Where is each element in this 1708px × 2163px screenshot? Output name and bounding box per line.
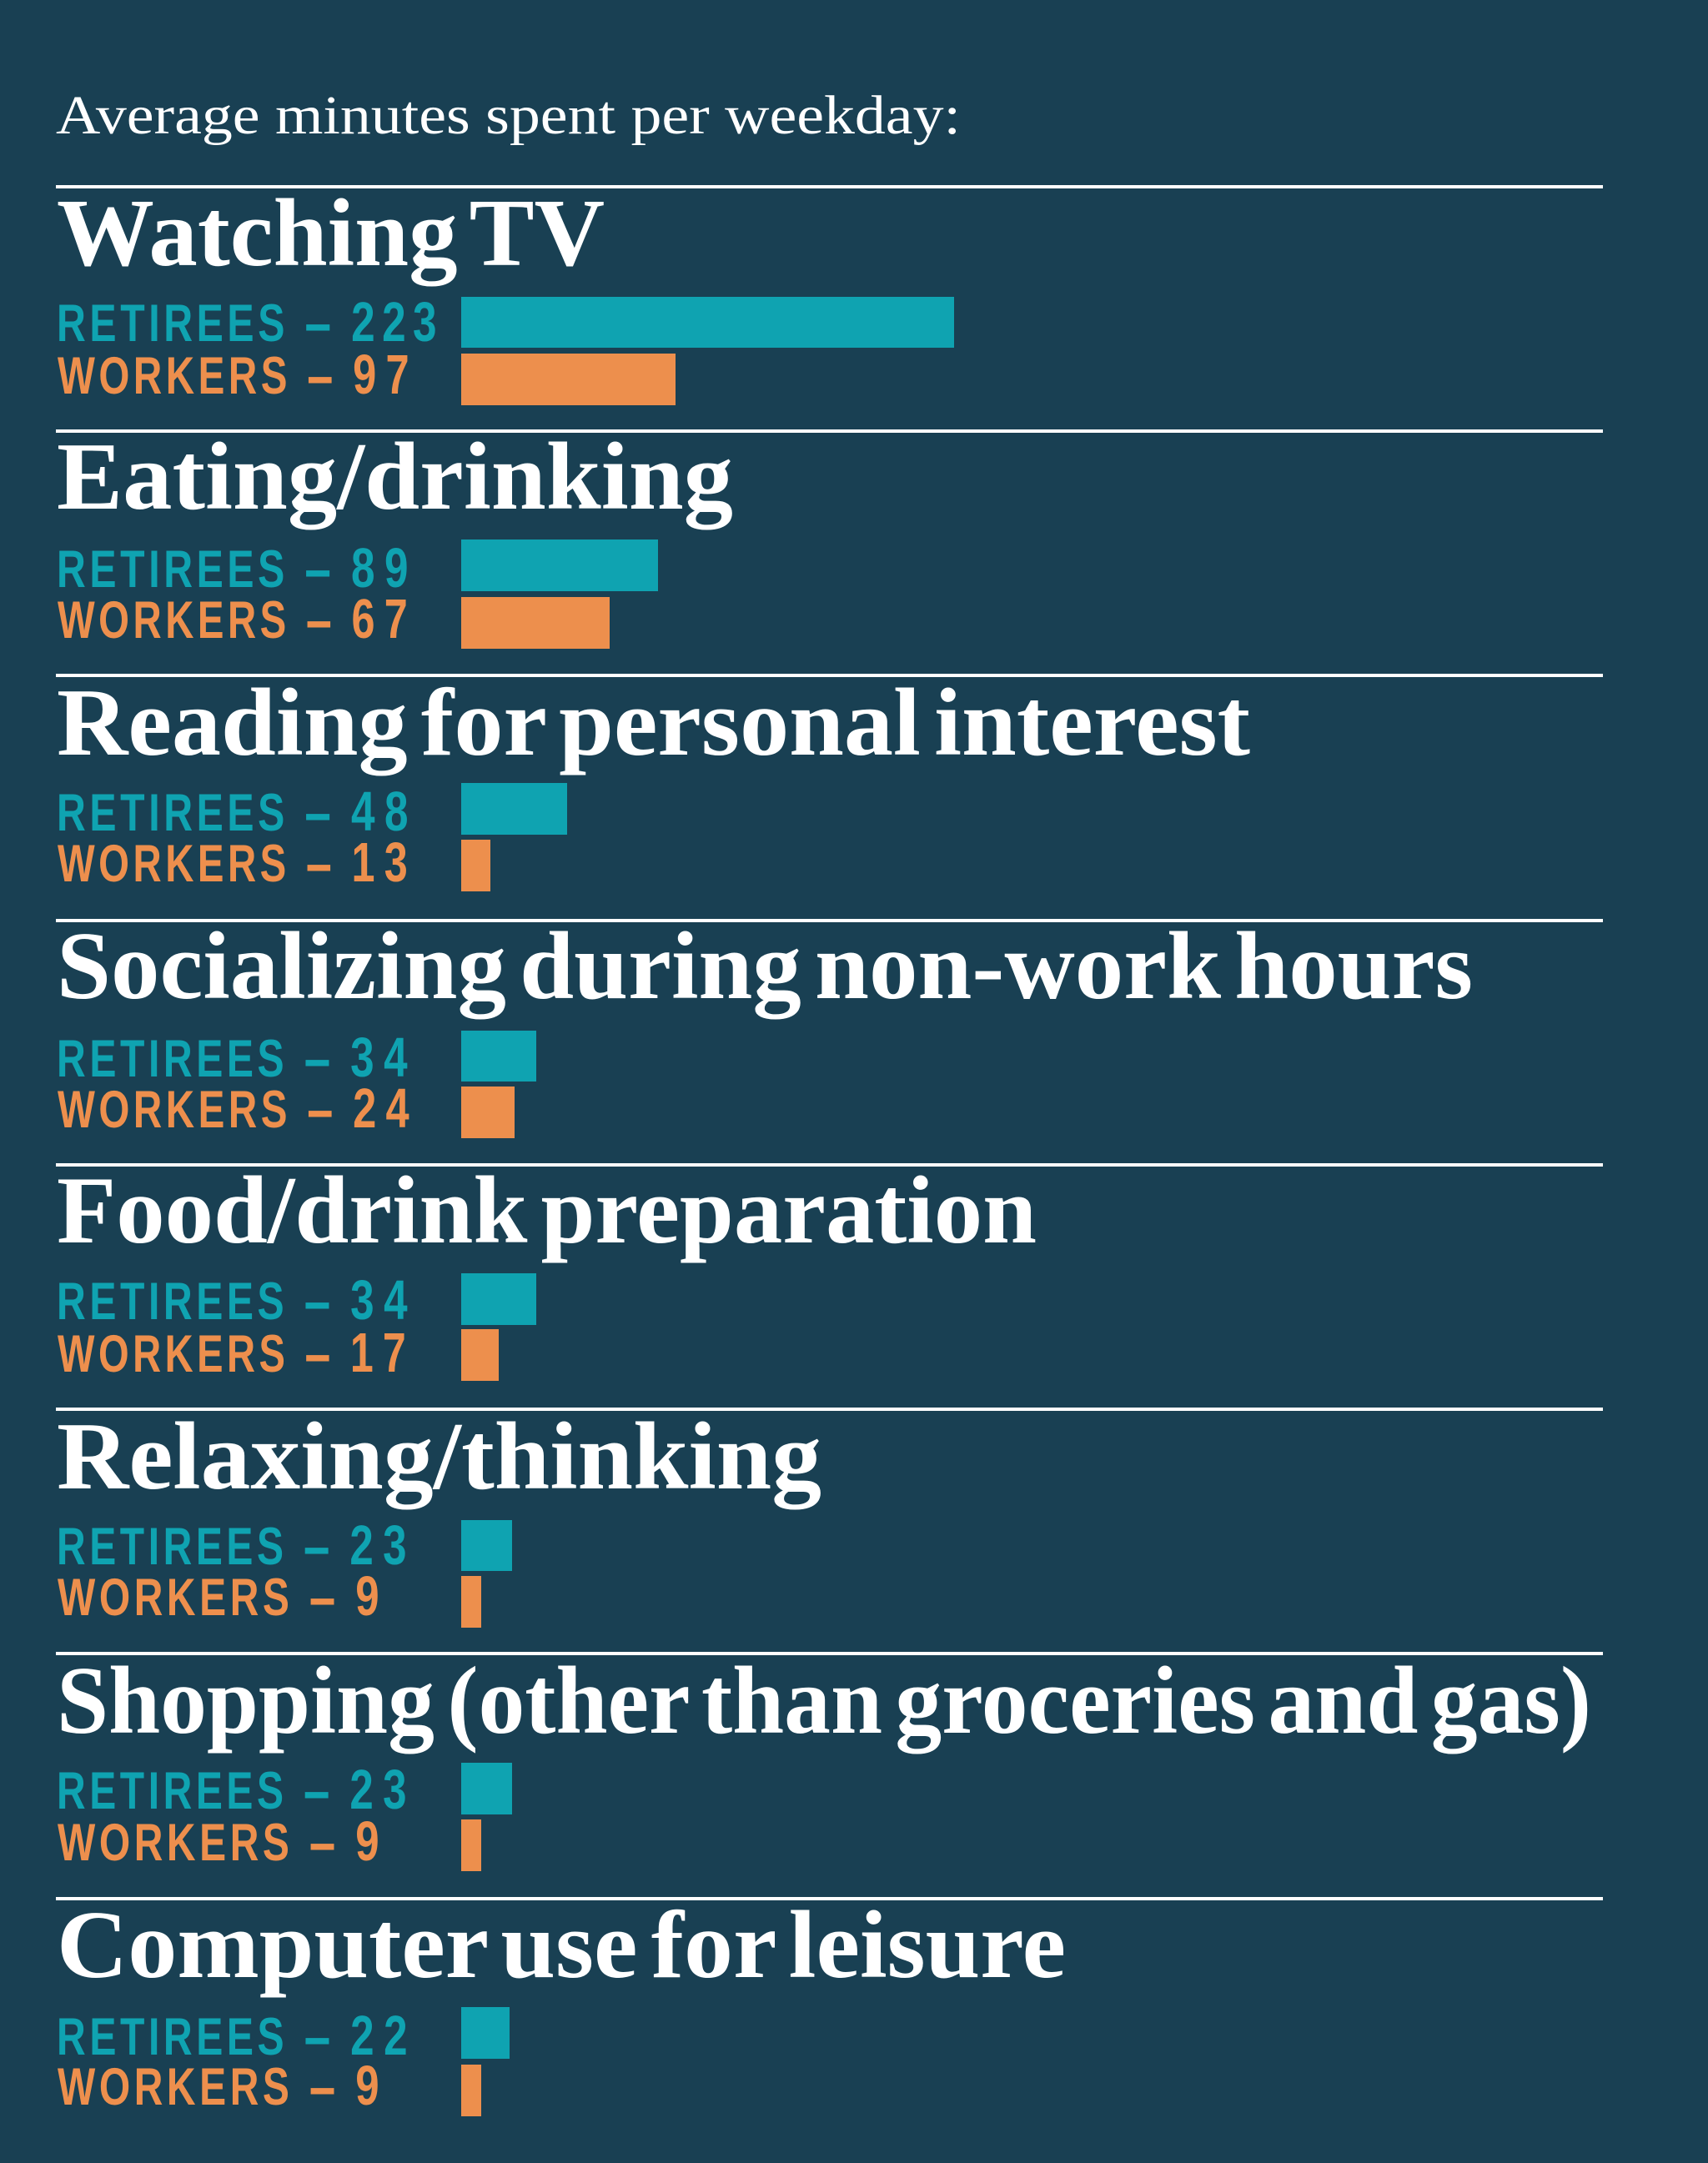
label: workers 9: –: [309, 1808, 339, 1877]
label: retirees 89: 89: [351, 537, 418, 600]
label: retirees 34: –: [304, 1267, 334, 1336]
label: retirees 22: RETIREES: [57, 2008, 359, 2066]
panel: relaxing/thinking: [56, 1403, 1603, 1632]
label: retirees 48: –: [304, 778, 334, 847]
label: retirees 34: –: [304, 1024, 334, 1093]
label: workers 97: WORKERS: [58, 347, 367, 405]
label: retirees 22: –: [304, 2002, 334, 2071]
heading: computer use for leisure: Computer use for leisure: [57, 1892, 1066, 1999]
bar: workers 13: [461, 840, 490, 891]
label: workers 9: WORKERS: [58, 2058, 367, 2116]
label: workers 17: 17: [350, 1322, 415, 1384]
label: workers 9: WORKERS: [58, 1568, 367, 1627]
label: workers 24: WORKERS: [58, 1081, 367, 1139]
panel: watching TV: [56, 180, 1603, 410]
bar: workers 24: [461, 1087, 515, 1138]
panel: shopping: [56, 1648, 1603, 1877]
label: workers 13: WORKERS: [58, 835, 367, 893]
label: workers 24: –: [307, 1075, 337, 1144]
label: workers 97: –: [307, 341, 337, 410]
label: retirees 34: RETIREES: [57, 1030, 359, 1088]
heading: relaxing/thinking: Relaxing/thinking: [57, 1403, 821, 1510]
label: retirees 48: RETIREES: [57, 784, 359, 842]
label: retirees 22: 22: [350, 2005, 417, 2067]
bar: retirees 34: [461, 1273, 536, 1325]
label: retirees 34: 34: [350, 1269, 417, 1332]
bar: retirees 23: [461, 1763, 512, 1814]
bar: retirees 23: [461, 1520, 512, 1571]
heading: food/drink preparation: Food/drink preparation: [57, 1157, 1037, 1264]
label: retirees 23: 23: [349, 1759, 416, 1821]
label: workers 9: 9: [355, 2055, 389, 2117]
label: workers 13: –: [306, 829, 335, 898]
panel: computer use for leisure: [56, 1892, 1603, 2121]
bar: retirees 48: [461, 783, 567, 835]
label: retirees 23: RETIREES: [57, 1762, 359, 1820]
label: retirees 23: –: [304, 1756, 334, 1825]
label: workers 9: 9: [355, 1565, 389, 1628]
bar: retirees 89: [461, 539, 658, 591]
heading: shopping: Shopping (other than groceries and gas): [57, 1648, 1591, 1754]
heading: watching TV: Watching TV: [57, 180, 605, 287]
heading: eating/drinking: Eating/drinking: [57, 424, 733, 530]
heading: reading for personal interest: Reading for personal interest: [57, 670, 1250, 776]
label: workers 17: WORKERS: [58, 1325, 367, 1383]
label: workers 67: –: [306, 585, 335, 655]
panel: reading for personal interest: [56, 670, 1603, 898]
label: workers 67: 67: [351, 588, 417, 650]
label: retirees 23: RETIREES: [57, 1518, 359, 1576]
label: retirees 34: RETIREES: [57, 1272, 359, 1331]
bar: retirees 223: [461, 297, 954, 348]
bar: retirees 34: [461, 1031, 536, 1082]
label: retirees 23: –: [304, 1512, 334, 1581]
label: retirees 48: 48: [351, 780, 418, 843]
panel: eating/drinking: [56, 424, 1603, 655]
intro heading: Average minutes spent per weekday:: [56, 85, 961, 146]
label: workers 13: 13: [351, 831, 417, 894]
label: workers 9: –: [309, 1563, 339, 1632]
label: retirees 34: 34: [350, 1026, 417, 1089]
label: workers 9: 9: [355, 1810, 389, 1873]
bar: workers 17: [461, 1329, 499, 1381]
label: retirees 23: 23: [349, 1514, 416, 1577]
bar: workers 9: [461, 2065, 481, 2116]
label: workers 9: WORKERS: [58, 1814, 367, 1872]
bar: workers 97: [461, 354, 676, 405]
label: workers 9: –: [309, 2052, 339, 2121]
label: workers 17: –: [304, 1319, 334, 1388]
label: workers 24: 24: [353, 1077, 419, 1140]
bar: retirees 22: [461, 2007, 510, 2059]
label: workers 97: 97: [353, 344, 419, 406]
label: retirees 223: 223: [351, 291, 444, 354]
label: retirees 89: RETIREES: [57, 540, 359, 599]
label: retirees 89: –: [304, 534, 334, 604]
panel: food/drink preparation: [56, 1157, 1603, 1388]
label: retirees 223: RETIREES: [57, 294, 359, 353]
heading: socializing during non-work hours: Socializing during non-work hours: [57, 913, 1473, 1020]
bar: workers 67: [461, 597, 610, 649]
bar: workers 9: [461, 1819, 481, 1871]
label: retirees 223: –: [305, 289, 335, 358]
panel: socializing during non-work hours: [56, 913, 1603, 1144]
label: workers 67: WORKERS: [58, 591, 367, 650]
bar: workers 9: [461, 1576, 481, 1628]
